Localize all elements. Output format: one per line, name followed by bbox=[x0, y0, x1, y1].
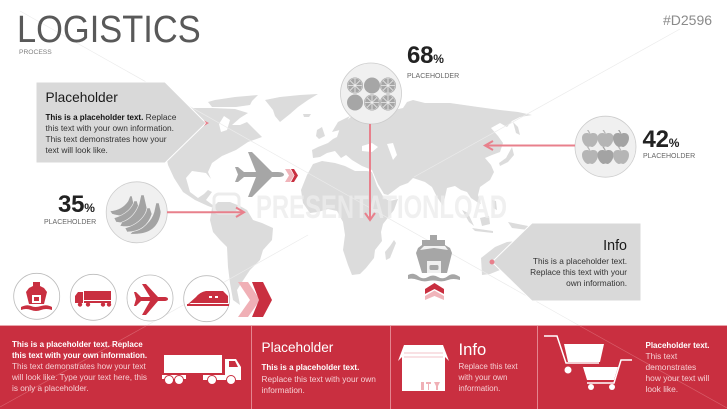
callout heading: Placeholder bbox=[46, 90, 118, 105]
callout: info bbox=[490, 224, 640, 302]
icon: plane on map bbox=[235, 152, 284, 197]
footer text 1: This is a placeholder text. Replace bbox=[12, 340, 143, 349]
arrow: down to africa bbox=[365, 124, 375, 220]
icon: truck circle bbox=[70, 274, 116, 320]
chevrons: ship bbox=[425, 283, 444, 300]
callout text: text will look like. bbox=[46, 145, 108, 155]
footer text 1: This text demonstrates how your text bbox=[12, 362, 146, 371]
world map bbox=[165, 94, 532, 305]
footer text 3: with your own bbox=[458, 373, 507, 382]
label: 35 percent: PLACEHOLDER bbox=[44, 219, 96, 226]
stat: 35 percent: 35% bbox=[58, 190, 95, 218]
icon: train circle bbox=[184, 276, 230, 322]
icon: plane circle bbox=[127, 275, 173, 321]
footer text 2: This is a placeholder text. bbox=[262, 363, 359, 372]
south east asia islands bbox=[462, 200, 528, 233]
watermark: PRESENTATIONLOAD bbox=[256, 189, 507, 225]
subtitle: PROCESS bbox=[19, 48, 52, 56]
footer text 1: this text with your own information. bbox=[12, 351, 147, 360]
icon: truck bbox=[162, 355, 241, 384]
footer text 1: will look like. Type your text here, this bbox=[12, 373, 147, 382]
info heading: Info bbox=[603, 238, 627, 254]
footer text 4: look like. bbox=[646, 384, 678, 394]
label: 42 percent: PLACEHOLDER bbox=[643, 153, 695, 160]
divider bbox=[390, 326, 391, 409]
info text: own information. bbox=[566, 278, 627, 288]
stat: 68 percent: 68% bbox=[407, 42, 444, 69]
label: 68 percent: PLACEHOLDER bbox=[407, 73, 459, 80]
chevrons: large bbox=[238, 282, 272, 317]
scandinavia bbox=[332, 116, 350, 132]
icon: box bbox=[398, 345, 449, 391]
icon: carts bbox=[544, 335, 632, 390]
footer text 2 bbox=[262, 363, 376, 395]
chevrons: plane bbox=[285, 169, 298, 182]
footer text 4: This text bbox=[646, 351, 677, 361]
arrow: right to south america bbox=[167, 208, 244, 217]
title: LOGISTICS bbox=[17, 9, 201, 51]
watermark bbox=[214, 189, 507, 225]
iceland bbox=[303, 114, 311, 117]
footer text 3: Replace this text bbox=[458, 362, 518, 371]
footer heading 3: Info bbox=[458, 340, 486, 359]
footer text 1: is only a placeholder. bbox=[12, 384, 88, 393]
south america bbox=[210, 202, 273, 305]
callout text: this text with your own information. bbox=[46, 123, 174, 133]
product code: #D2596 bbox=[663, 12, 712, 28]
footer text 2: information. bbox=[262, 385, 305, 395]
footer text 2: Replace this text with your own bbox=[262, 374, 376, 384]
divider bbox=[251, 326, 252, 409]
footer panel bbox=[0, 325, 727, 409]
footer text 1 bbox=[12, 340, 147, 393]
callout text: This is a placeholder text. Replace bbox=[46, 112, 176, 122]
icon: apples circle bbox=[575, 116, 636, 177]
icon: bananas circle bbox=[106, 182, 167, 243]
greenland bbox=[265, 94, 318, 122]
madagascar bbox=[385, 240, 396, 260]
footer text 3 bbox=[458, 362, 518, 393]
info text: Replace this text with your bbox=[530, 267, 627, 277]
arctic islands bbox=[208, 95, 258, 107]
footer heading 2: Placeholder bbox=[262, 340, 333, 355]
icon: oranges circle bbox=[340, 63, 402, 124]
callout text: This text demonstrates how your bbox=[46, 134, 167, 144]
africa bbox=[301, 161, 398, 275]
britain bbox=[316, 127, 325, 139]
footer text 4: how your text will bbox=[646, 373, 709, 383]
info text bbox=[530, 256, 627, 288]
arrow: left to asia bbox=[485, 141, 575, 150]
callout: placeholder bbox=[36, 82, 209, 162]
japan and sakhalin bbox=[499, 122, 520, 166]
australia bbox=[481, 240, 530, 275]
icon: ship large bbox=[408, 235, 460, 281]
footer text 4: demonstrates bbox=[646, 362, 696, 372]
eurasia bbox=[312, 100, 532, 206]
divider bbox=[536, 326, 538, 409]
footer text 4 bbox=[646, 340, 710, 394]
north america bbox=[165, 108, 262, 211]
stat: 42 percent: 42% bbox=[642, 126, 679, 152]
info text: This is a placeholder text. bbox=[533, 256, 627, 266]
footer text 3: information. bbox=[458, 384, 500, 393]
footer text 4: Placeholder text. bbox=[646, 340, 710, 350]
icon: ship circle bbox=[14, 273, 60, 319]
callout text bbox=[46, 112, 176, 155]
inland seas bbox=[219, 116, 397, 160]
